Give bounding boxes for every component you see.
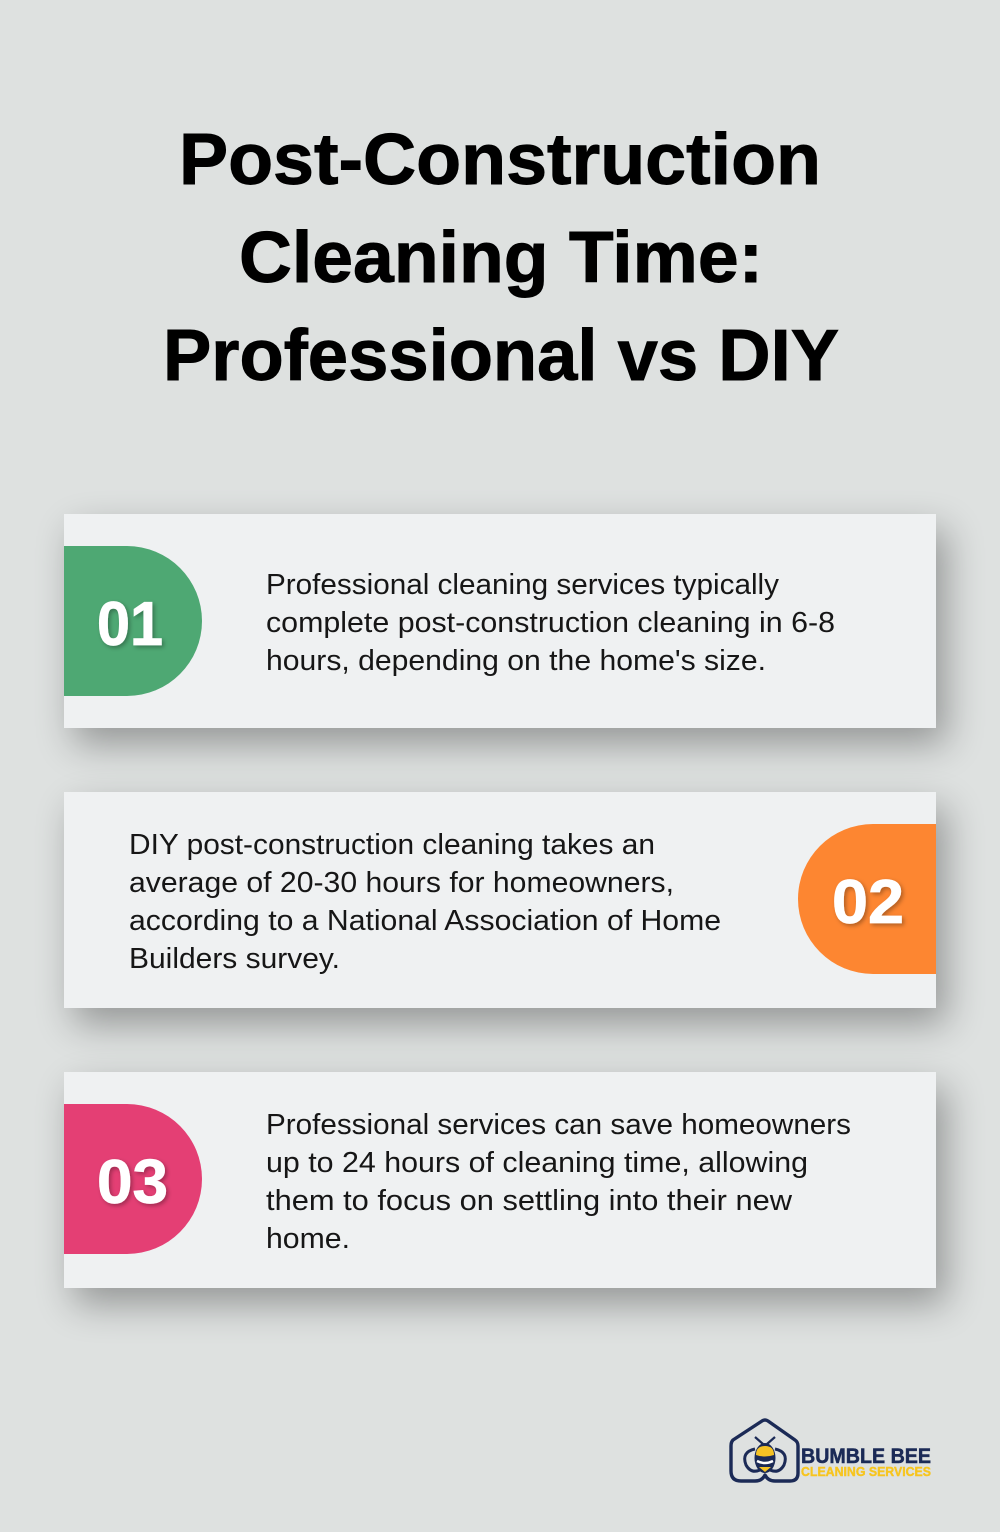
title: Cleaning Time:: [239, 218, 763, 298]
text: card 2 body: [129, 829, 721, 975]
text: card 1 body: hours, depending on the home's size.: [266, 645, 766, 677]
panel: card 1: [64, 514, 946, 744]
logo wordmark: [801, 1445, 931, 1479]
text: card 2 body: Builders survey.: [129, 943, 340, 975]
text: card 3 body: [266, 1109, 851, 1255]
text: card 2 body: according to a National Association of Home: [129, 905, 721, 937]
text: card 1 body: Professional cleaning services typically: [266, 569, 779, 601]
badge: 02: [798, 824, 936, 974]
icon: house outline with bee: [731, 1420, 798, 1481]
text: card 3 body: Professional services can save homeowners: [266, 1109, 851, 1141]
badge: 03: [64, 1104, 202, 1254]
text: card 2 body: DIY post-construction cleaning takes an: [129, 829, 655, 861]
text: card 2 body: average of 20-30 hours for homeowners,: [129, 867, 674, 899]
logo: Bumble Bee Cleaning Services: [731, 1420, 931, 1481]
badge: 01: [64, 546, 202, 696]
badge: 02: 02: [832, 868, 904, 937]
text: card 1 body: [266, 569, 835, 677]
badge: 01: 01: [97, 590, 163, 659]
text: card 1 body: complete post-construction cleaning in 6-8: [266, 607, 835, 639]
text: card 3 body: home.: [266, 1223, 350, 1255]
panel: card 3: [64, 1072, 946, 1304]
text: card 3 body: up to 24 hours of cleaning time, allowing: [266, 1147, 808, 1179]
logo wordmark: CLEANING SERVICES: [801, 1465, 931, 1479]
title: [163, 120, 839, 396]
panel: card 2: [64, 792, 946, 1024]
title: Post-Construction: [179, 120, 821, 200]
title: Professional vs DIY: [163, 316, 839, 396]
text: card 3 body: them to focus on settling into their new: [266, 1185, 793, 1217]
logo wordmark: BUMBLE BEE: [801, 1445, 931, 1468]
badge: 03: 03: [97, 1148, 168, 1217]
